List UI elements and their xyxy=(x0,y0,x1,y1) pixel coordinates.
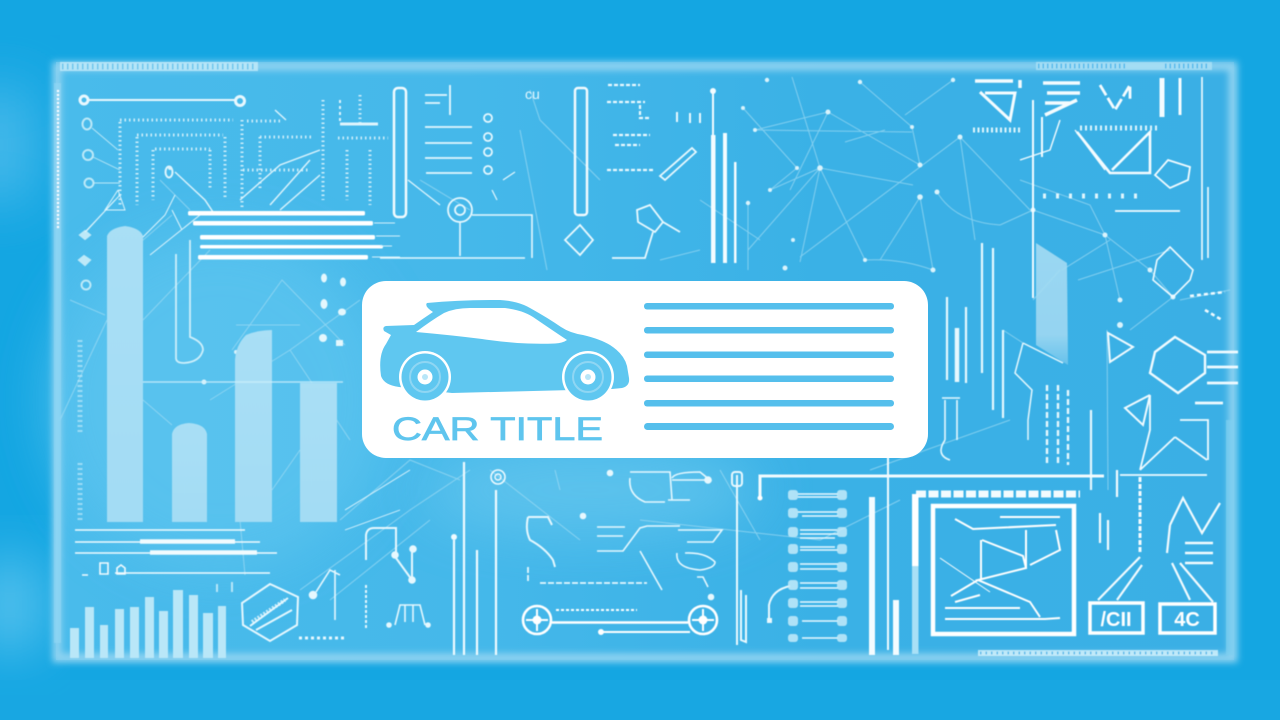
connector list xyxy=(767,494,838,638)
text placeholder lines xyxy=(644,303,894,430)
badge: right small box xyxy=(1160,604,1215,633)
network lines background xyxy=(60,77,1230,600)
small schematic top centre xyxy=(380,85,540,258)
tall rounded indicator 1 xyxy=(394,88,406,217)
lower centre circuit schematic xyxy=(527,470,722,600)
right side hexagons xyxy=(1108,247,1238,475)
axle diagram with wheels xyxy=(523,606,717,634)
lower vertical bars xyxy=(869,497,899,655)
left rail xyxy=(54,83,61,643)
framed chart box xyxy=(933,506,1074,634)
long horizontal connector xyxy=(758,456,1104,650)
connector list end caps xyxy=(788,490,847,642)
circuit solid traces xyxy=(85,100,378,255)
badge: left small box: /CII xyxy=(1100,609,1132,631)
tall thin probe xyxy=(732,472,746,645)
header strip left xyxy=(60,62,258,71)
hexagon badge xyxy=(217,582,298,641)
small schematic top centre: cu xyxy=(525,86,540,102)
bottom status strip xyxy=(978,650,1218,656)
icon: car silhouette xyxy=(380,300,629,403)
central title card xyxy=(362,281,928,458)
badge: right small box: 4C xyxy=(1174,609,1200,631)
translucent cylinder right xyxy=(1036,243,1068,365)
tall bar beside box xyxy=(912,494,918,654)
badge: left small box xyxy=(1090,603,1143,633)
stacked bar leads xyxy=(372,223,400,257)
tall vertical rules xyxy=(710,88,736,263)
network nodes xyxy=(168,78,1176,435)
tall rounded indicator 2 xyxy=(575,88,587,215)
striped bar over box xyxy=(916,490,1080,498)
small icon cluster xyxy=(319,274,346,346)
stacked white bars xyxy=(188,211,383,260)
panel: glowing blueprint frame xyxy=(50,62,1234,660)
chart axis, bent trace and labels xyxy=(80,240,343,523)
lower left small schematics xyxy=(299,470,430,638)
top right blueprint shapes xyxy=(973,77,1208,298)
diamond and diagram xyxy=(565,85,700,258)
top-left connector line xyxy=(80,96,244,106)
lower centre vertical rules xyxy=(451,462,505,655)
right side vertical bars and ticks xyxy=(941,243,1091,490)
right wiring xyxy=(1098,470,1220,602)
lower left horizontal bars xyxy=(75,530,277,575)
header strip right xyxy=(1036,62,1212,70)
small bar chart xyxy=(70,590,226,658)
large bar chart xyxy=(107,226,337,522)
left node column xyxy=(79,118,120,290)
heading: car title: CAR TITLE xyxy=(392,411,603,447)
circuit dotted traces xyxy=(120,95,388,207)
